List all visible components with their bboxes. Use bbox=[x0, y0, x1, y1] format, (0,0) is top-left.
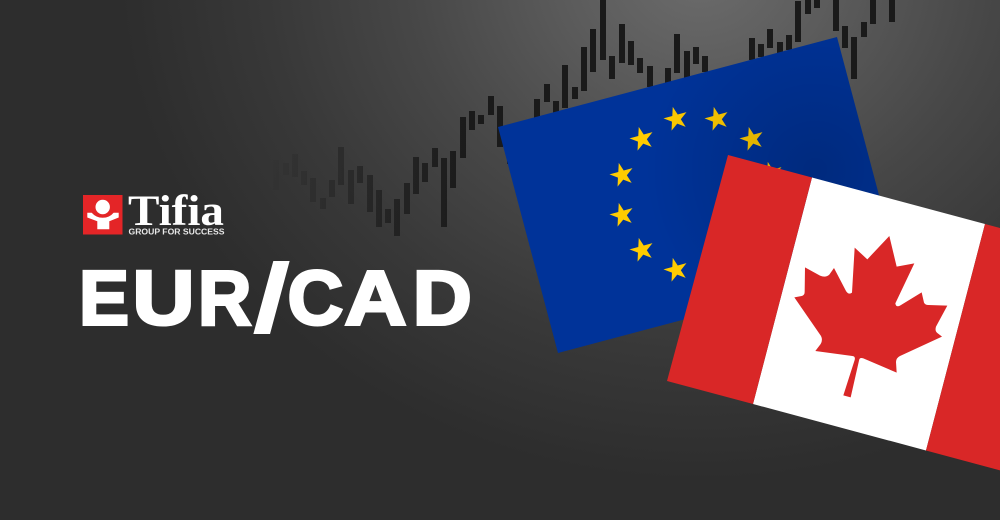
EU flag bbox=[498, 37, 897, 353]
title: E bbox=[79, 256, 129, 342]
title: D bbox=[413, 256, 472, 342]
title: / bbox=[252, 243, 291, 353]
title: C bbox=[288, 256, 343, 342]
logo tagline: GROUP FOR SUCCESS bbox=[128, 228, 224, 236]
shadow on EU flag bbox=[498, 37, 897, 353]
EU flag stars bbox=[607, 104, 785, 283]
title: U bbox=[132, 256, 194, 342]
title: R bbox=[198, 256, 251, 342]
candlestick chart bbox=[273, 0, 895, 236]
logo wordmark: Tifia bbox=[128, 188, 224, 235]
logo icon bbox=[83, 195, 122, 234]
title: A bbox=[344, 256, 406, 342]
logo bbox=[83, 188, 224, 236]
maple leaf bbox=[794, 236, 947, 397]
title bbox=[79, 243, 472, 353]
Canada flag bbox=[667, 155, 1000, 472]
